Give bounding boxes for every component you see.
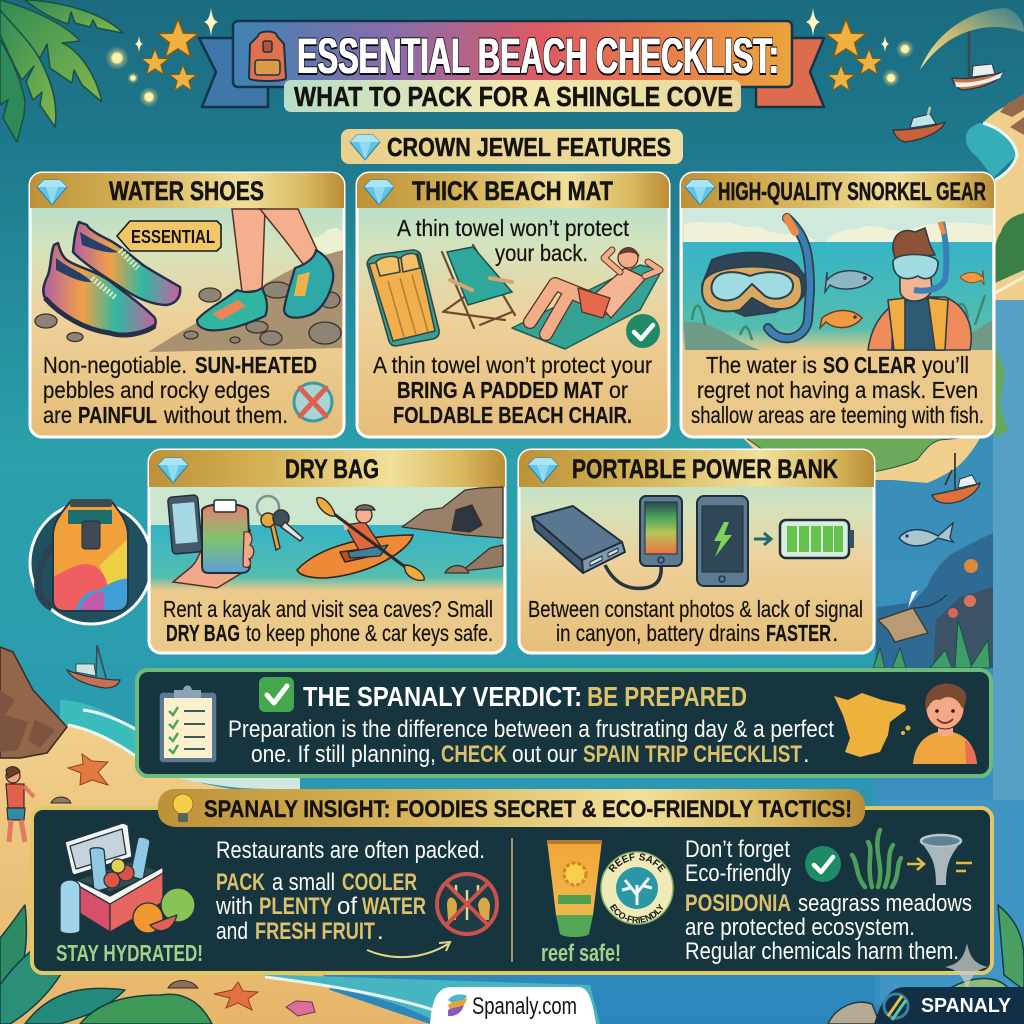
icon: diamond xyxy=(685,180,715,205)
bag colours xyxy=(54,504,127,610)
sea xyxy=(151,525,503,590)
header bar xyxy=(30,173,344,208)
fish orange xyxy=(820,310,862,328)
bag outline xyxy=(53,502,128,611)
subtitle plate xyxy=(284,80,741,112)
label: reef safe: reef safe! xyxy=(541,940,621,967)
small rock xyxy=(51,797,71,803)
shore ripples xyxy=(150,768,300,790)
url text: Spanaly.com xyxy=(472,993,577,1020)
hand xyxy=(173,530,250,588)
cooler text: WATER xyxy=(362,893,426,920)
icon: compass xyxy=(884,994,908,1020)
verdict text: one. If still planning, xyxy=(251,741,436,768)
panel: thick beach mat xyxy=(357,173,669,437)
body text: A thin towel won’t protect your xyxy=(373,352,652,378)
body text: SO CLEAR xyxy=(823,352,916,378)
towel mat xyxy=(512,265,662,349)
cooler text: and xyxy=(216,918,248,945)
roll top xyxy=(70,499,112,507)
clouds xyxy=(684,222,992,242)
snorkel tube colour xyxy=(768,218,810,338)
verdict text: out our xyxy=(512,741,577,768)
fish small xyxy=(960,270,984,285)
panel: snorkel gear xyxy=(681,173,994,437)
seabed xyxy=(684,320,992,350)
body text: in canyon, battery drains xyxy=(556,620,760,646)
eco text: are protected ecosystem. xyxy=(685,914,915,941)
tag: essential: ESSENTIAL xyxy=(131,227,215,247)
foam bottom xyxy=(262,975,600,1024)
fish right xyxy=(899,523,953,546)
body text: FOLDABLE BEACH CHAIR. xyxy=(393,402,632,428)
panel: verdict xyxy=(137,670,991,776)
body text: . xyxy=(832,620,839,646)
footer tab: spanaly.com xyxy=(430,987,596,1024)
sea cave xyxy=(402,487,503,573)
cooler text: Restaurants are often packed. xyxy=(216,837,485,864)
title banner xyxy=(199,21,824,112)
body text: or xyxy=(609,377,628,403)
icon: dry bag medallion xyxy=(30,498,152,624)
phone xyxy=(168,495,202,554)
icon: smiling guide xyxy=(913,684,977,764)
body text: PAINFUL xyxy=(78,402,157,428)
battery xyxy=(780,520,854,558)
background: green land xyxy=(735,430,985,472)
section heading: crown jewel features: CROWN JEWEL FEATURES xyxy=(387,132,671,162)
crescent sail xyxy=(920,8,1024,70)
body text: The water is xyxy=(706,352,817,378)
starfish bottom xyxy=(214,982,258,1010)
seaweed xyxy=(873,620,990,668)
shore shallows xyxy=(60,700,260,790)
diving mask xyxy=(702,253,812,316)
icon: backpack xyxy=(249,32,286,81)
shell xyxy=(286,1001,315,1016)
pebbles xyxy=(35,282,341,345)
icon: cross xyxy=(294,383,332,421)
coral xyxy=(948,559,978,618)
body text: Non-negotiable. xyxy=(43,352,187,378)
weeds xyxy=(692,295,985,340)
verdict heading: BE PREPARED xyxy=(587,681,747,712)
icon: diamond xyxy=(158,458,188,483)
icon: clipboard xyxy=(159,686,217,763)
starfish left xyxy=(68,754,108,785)
boat right xyxy=(932,453,980,503)
body text: are xyxy=(43,402,72,428)
body text: FASTER xyxy=(766,620,831,646)
palm fronds xyxy=(0,0,123,142)
heading: DRY BAG xyxy=(285,454,379,484)
top text: your back. xyxy=(495,240,588,266)
beach left xyxy=(0,725,430,1024)
back shoe xyxy=(73,222,180,305)
stingray xyxy=(878,595,947,642)
eco text: Regular chemicals harm them. xyxy=(685,938,959,965)
rock facets xyxy=(0,690,55,752)
illustration: cooler xyxy=(60,823,195,934)
badge: reef safe: REEF SAFE xyxy=(608,853,666,872)
padded mat xyxy=(367,250,439,346)
eco text: seagrass meadows xyxy=(798,890,972,917)
legs xyxy=(232,209,318,292)
cooler text: FRESH FRUIT xyxy=(255,918,375,945)
background: pale right edge xyxy=(993,285,1024,805)
snorkeler xyxy=(868,222,971,350)
body text: Between constant photos & lack of signal xyxy=(528,596,863,622)
background: right sea xyxy=(875,285,995,1005)
arrow xyxy=(367,942,450,957)
sunbathing man xyxy=(530,248,660,334)
banner body xyxy=(233,21,792,87)
pebble ground xyxy=(148,250,343,352)
panel: insight xyxy=(30,789,994,975)
body text: pebbles and rocky edges xyxy=(43,377,270,403)
foam edge xyxy=(68,710,137,757)
verdict text: Preparation is the difference between a frustrating day & a perfect xyxy=(228,716,834,743)
sky xyxy=(683,208,992,244)
badge: reef safe xyxy=(600,851,674,925)
panel: portable power bank xyxy=(519,450,874,653)
person on beach xyxy=(6,767,34,842)
background: land under cards xyxy=(735,430,992,483)
kayak xyxy=(297,535,413,578)
background: reef xyxy=(875,533,993,668)
beach chair xyxy=(442,245,515,328)
eco text: Don’t forget xyxy=(685,836,790,863)
cooler text: PACK xyxy=(216,869,265,896)
background: coast top right xyxy=(966,94,1024,438)
verdict heading: THE SPANALY VERDICT: xyxy=(303,681,582,712)
water xyxy=(683,242,992,350)
boat top right xyxy=(952,30,1003,90)
decoration: stars right xyxy=(806,8,914,90)
cooler text: . xyxy=(377,918,384,945)
icon: filtered lines xyxy=(956,863,972,871)
waterproof pouch xyxy=(202,500,250,573)
illustration: sunscreen tube xyxy=(547,840,602,937)
heading: THICK BEACH MAT xyxy=(412,176,613,206)
leaf bottom right xyxy=(950,905,1024,990)
heading: PORTABLE POWER BANK xyxy=(572,454,838,484)
power bank xyxy=(532,506,625,573)
strap xyxy=(38,545,53,608)
icon: funnel xyxy=(921,835,961,885)
buckle xyxy=(82,521,100,549)
snorkel tube xyxy=(768,218,810,338)
walking shoes xyxy=(197,250,333,330)
fingers xyxy=(243,532,254,567)
panel: water shoes xyxy=(30,173,344,437)
footer badge: spanaly xyxy=(874,987,1024,1024)
header bar xyxy=(519,450,874,487)
insight pill xyxy=(158,789,865,827)
body text: regret not having a mask. Even xyxy=(697,377,978,403)
icon: spain map xyxy=(834,693,910,757)
icon: check xyxy=(626,314,660,348)
label: stay hydrated: STAY HYDRATED! xyxy=(56,940,203,966)
cooler text: a small xyxy=(272,869,335,896)
ribbon tail right xyxy=(756,38,824,107)
body text: SUN-HEATED xyxy=(195,352,317,378)
arrow xyxy=(754,533,771,545)
body text: DRY BAG xyxy=(166,620,240,646)
insight heading: SPANALY INSIGHT: FOODIES SECRET & ECO-FRIENDLY TACTICS! xyxy=(204,796,852,823)
divider xyxy=(511,838,513,962)
fish grey xyxy=(825,271,873,292)
decoration: stars left xyxy=(105,8,218,107)
subtitle text: WHAT TO PACK FOR A SHINGLE COVE xyxy=(294,81,733,112)
verdict text: CHECK xyxy=(441,741,508,768)
phone one xyxy=(640,496,682,566)
kayaker xyxy=(345,505,388,558)
cooler text: PLENTY xyxy=(259,893,332,920)
section heading: crown jewel features xyxy=(341,129,683,164)
header bar xyxy=(357,173,669,208)
cloud xyxy=(300,228,342,255)
snorkel tip xyxy=(787,218,795,232)
foam line xyxy=(265,977,470,1024)
paddle xyxy=(317,498,424,580)
icon: diamond xyxy=(37,180,67,205)
sky xyxy=(151,487,503,526)
splash xyxy=(908,590,918,608)
keys xyxy=(257,496,303,550)
boat left xyxy=(67,645,120,688)
icon: check xyxy=(805,846,841,882)
body text: Rent a kayak and visit sea caves? Small xyxy=(163,596,493,622)
ribbon tail left xyxy=(199,38,268,107)
icon: diamond xyxy=(364,180,394,205)
panel: dry bag xyxy=(149,450,505,653)
eco text: POSIDONIA xyxy=(685,890,791,917)
tag: essential xyxy=(117,221,221,251)
rock bottom right xyxy=(828,1002,880,1024)
icon: no restaurants xyxy=(437,874,497,934)
boat two xyxy=(893,107,945,142)
icon: check square xyxy=(259,677,294,712)
verdict text: . xyxy=(803,741,810,768)
body text: without them. xyxy=(163,402,288,428)
badge: reef safe: ECO-FRIENDLY xyxy=(610,904,664,924)
background: lower right sea xyxy=(880,800,1024,1000)
verdict text: SPAIN TRIP CHECKLIST xyxy=(583,741,802,768)
top text: A thin towel won’t protect xyxy=(397,215,629,241)
cable xyxy=(605,565,661,588)
cooler text: with xyxy=(215,893,253,920)
heading: WATER SHOES xyxy=(109,176,264,206)
cooler text: COOLER xyxy=(342,869,417,896)
leaves bottom left xyxy=(0,905,212,1024)
phone two xyxy=(697,496,748,586)
header bar xyxy=(149,450,505,487)
cooler text: of xyxy=(337,893,357,920)
icon: seagrass xyxy=(852,830,901,887)
arrow xyxy=(907,858,924,870)
brand name: SPANALY xyxy=(921,995,1012,1017)
icon: light bulb xyxy=(173,794,193,822)
body text: you’ll xyxy=(922,352,969,378)
background: reef dark xyxy=(933,587,993,668)
body text: BRING A PADDED MAT xyxy=(397,377,604,403)
front shoe xyxy=(43,243,156,335)
eco text: Eco-friendly xyxy=(685,860,791,887)
icon: spanaly logo xyxy=(448,994,467,1016)
icon: diamond xyxy=(350,135,380,160)
header bar xyxy=(681,173,994,208)
beach rock xyxy=(168,980,198,988)
rock left xyxy=(0,647,67,758)
body text: to keep phone & car keys safe. xyxy=(246,620,493,646)
sparkle watermark xyxy=(945,943,988,992)
icon: diamond xyxy=(528,458,558,483)
